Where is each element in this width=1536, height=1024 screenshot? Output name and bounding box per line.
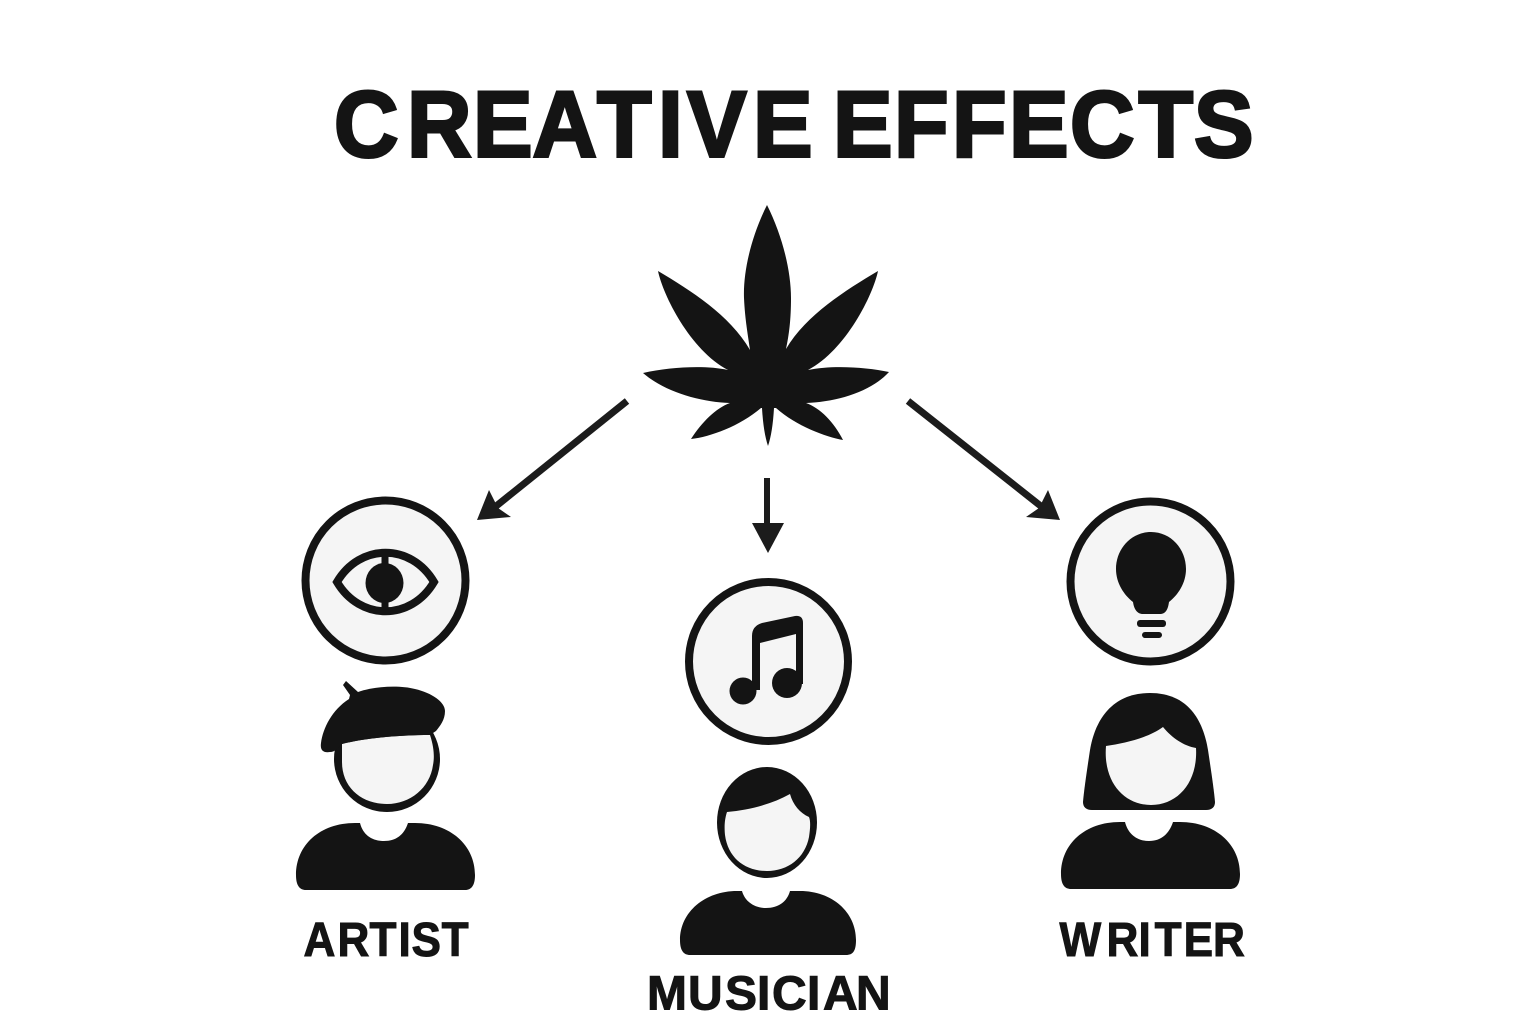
writer hair	[1083, 693, 1215, 810]
arrow: leaf to musician	[752, 478, 784, 553]
musician body	[680, 891, 856, 955]
figure: artist	[296, 681, 475, 890]
figure: writer	[1061, 693, 1240, 889]
musician head and hair	[717, 767, 817, 878]
label: writer: WRITER	[1060, 912, 1245, 966]
arrow: leaf to writer	[908, 401, 1060, 520]
icon: music note in circle	[689, 582, 848, 741]
writer body	[1061, 822, 1240, 889]
writer face	[1106, 727, 1196, 805]
artist face	[334, 706, 440, 812]
arrow: leaf to artist	[477, 401, 627, 520]
artist body	[296, 823, 475, 890]
icon: cannabis leaf	[643, 205, 889, 446]
label: artist: ARTIST	[304, 912, 469, 966]
label: musician: MUSICIAN	[647, 968, 891, 1020]
icon: eye in circle	[306, 500, 466, 660]
icon: light bulb in circle	[1070, 502, 1230, 662]
title: CREATIVE EFFECTS	[334, 72, 1254, 177]
artist beret	[321, 681, 445, 752]
figure: musician	[680, 767, 856, 955]
